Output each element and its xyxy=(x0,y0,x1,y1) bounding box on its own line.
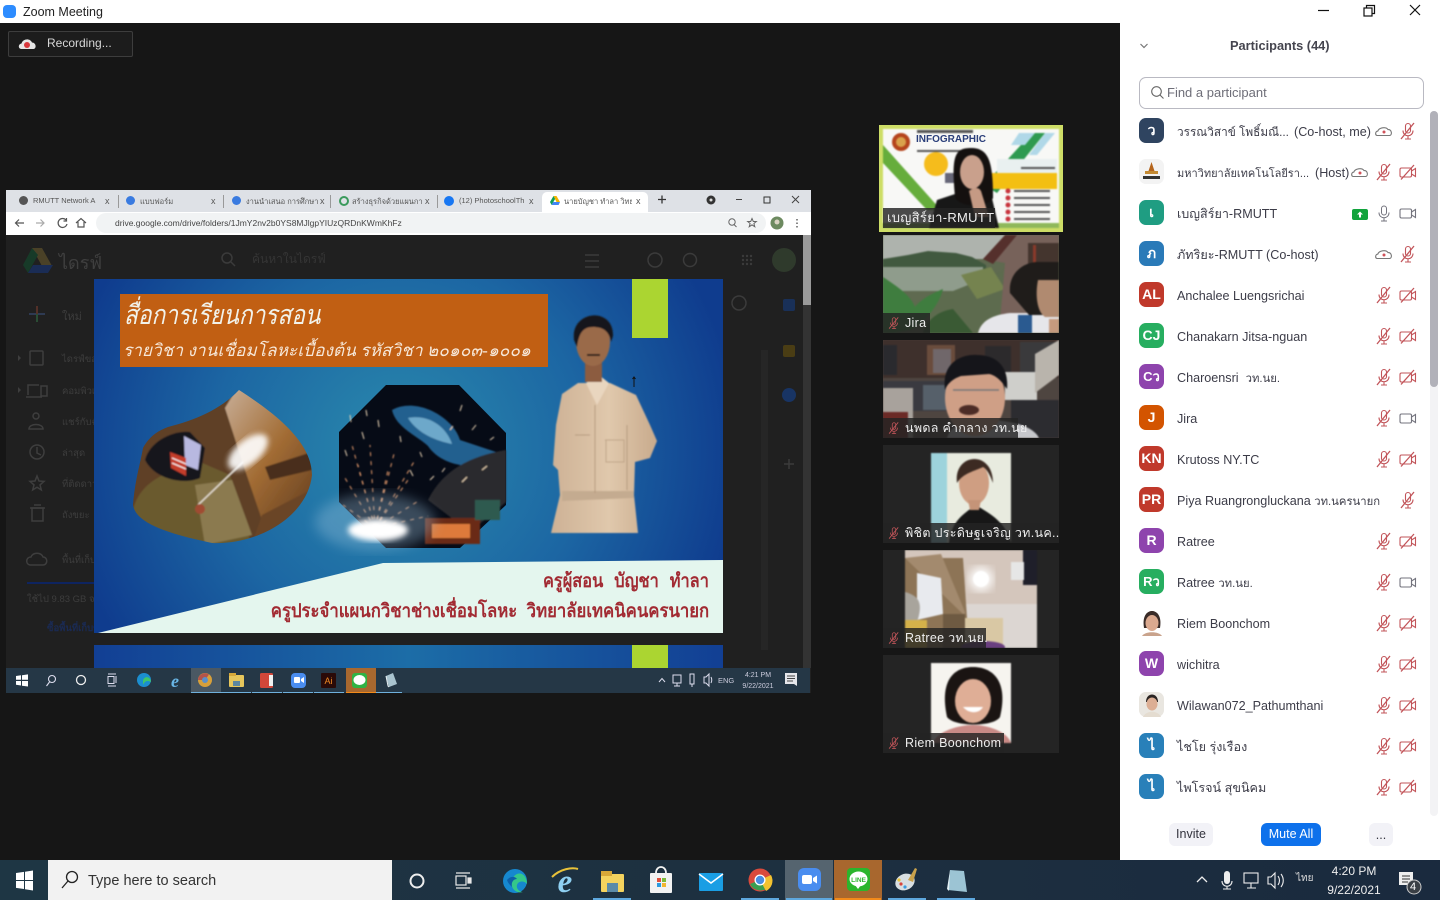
bottom banner shape xyxy=(98,560,723,633)
tab labels: x xyxy=(105,196,110,206)
participant row: Ratree: Ratree xyxy=(1177,535,1215,549)
participant row: Ratree xyxy=(1139,528,1416,553)
video tile: Pichit xyxy=(883,445,1059,543)
participant row: ไพโรจน์: ไพโรจน์ สุขนิคม xyxy=(1177,781,1266,795)
welder picture xyxy=(133,390,312,544)
Jira label xyxy=(883,313,930,333)
participant row: wichitra: wichitra xyxy=(1177,658,1220,672)
room video xyxy=(904,550,1038,648)
system clock: 4:20 PM xyxy=(1332,864,1376,878)
browser window buttons xyxy=(658,196,800,204)
taskbar icons xyxy=(16,860,1422,900)
participant row: ไพโรจน์: ไ xyxy=(1148,778,1155,794)
speaker label: นพดล คำกลาง วท.นย xyxy=(905,421,1028,435)
name label xyxy=(883,628,986,648)
participant row: มหาวิทยาลัย host: มหาวิทยาลัยเทคโนโลยีรา... xyxy=(1177,168,1309,180)
video tile: Jira xyxy=(883,235,1059,333)
participant row: Chanakarn: Chanakarn Jitsa-nguan xyxy=(1177,330,1307,344)
participant row: วรรณวิสาข์: วรรณวิสาข์ โพธิ์มณี... xyxy=(1177,125,1289,139)
participant row: Riem Boonchom: Riem Boonchom xyxy=(1177,617,1270,631)
more button xyxy=(1369,823,1393,846)
slide background and pictures xyxy=(94,279,723,633)
slide subheading: รายวิชา งานเชื่อมโลหะเบื้องต้น รหัสวิชา ๒๐๑๐๓-๑๐๐๑ xyxy=(123,341,531,360)
inner windows taskbar xyxy=(6,668,810,693)
recording indicator xyxy=(8,31,133,57)
shared screen: browser window xyxy=(6,190,811,693)
participant row: Piya xyxy=(1139,487,1414,512)
participant scrollbar xyxy=(1430,111,1438,816)
drive sidebar labels: ถังขยะ xyxy=(62,510,90,521)
participant row: มหาวิทยาลัย host xyxy=(1139,159,1416,184)
tab labels: งานนำเสนอ การศึกษา xyxy=(246,197,318,206)
participant row: Anchalee xyxy=(1139,282,1416,307)
next slide preview xyxy=(94,645,723,668)
icon: panel collapse chevron xyxy=(1140,44,1148,48)
participant row: wichitra: W xyxy=(1145,655,1158,671)
drive sidebar labels xyxy=(27,310,94,634)
sparks picture xyxy=(315,385,506,550)
inner taskbar highlights: e xyxy=(171,671,179,691)
participant row: ภัทริยะ xyxy=(1139,241,1414,266)
system clock: 9/22/2021 xyxy=(1327,883,1381,897)
participant row: ภัทริยะ: ภ xyxy=(1147,245,1156,261)
app title: Zoom Meeting xyxy=(23,5,103,19)
participant row: ไพโรจน์ xyxy=(1139,774,1416,799)
video tile: Riem Boonchom xyxy=(883,655,1059,753)
browser address bar xyxy=(6,212,811,235)
invite button: Invite xyxy=(1176,827,1206,841)
speaker label xyxy=(883,418,1018,438)
url text: drive.google.com/drive/folders/1JmY2nv2b0YS8MJlgpYIUzQRDnKWmKhFz xyxy=(115,218,402,228)
drive heading: ไดรฟ์ xyxy=(59,253,102,273)
participant row: Chanakarn: CJ xyxy=(1143,327,1160,343)
slide heading: สื่อการเรียนการสอน xyxy=(124,300,320,330)
participant row: Charoensri xyxy=(1139,364,1416,389)
name label xyxy=(883,523,1059,543)
participant row: Ratree: R xyxy=(1146,532,1157,548)
more button: ... xyxy=(1376,828,1386,842)
recording label: Recording... xyxy=(47,36,112,50)
participant row: วรรณวิสาข์: (Co-host, me) xyxy=(1294,125,1371,139)
drive sidebar labels: ล่าสุด xyxy=(62,448,85,459)
participant row: Anchalee: Anchalee Luengsrichai xyxy=(1177,289,1304,303)
drive logo and sidebar icons xyxy=(18,235,811,668)
icon: zoom logo xyxy=(3,5,16,18)
Jira video xyxy=(883,235,1059,333)
profile photo xyxy=(930,452,1012,543)
search prompt: Type here to search xyxy=(88,873,216,889)
icon: magnifier xyxy=(1151,86,1164,99)
participant row: Piya: Piya Ruangrongluckana วท.นครนายก xyxy=(1177,494,1380,508)
icon: search magnifier xyxy=(62,870,78,888)
video tile: Ratree xyxy=(883,550,1059,648)
presenter logo text: INFOGRAPHIC xyxy=(916,134,986,145)
language indicator: ไทย xyxy=(1296,873,1313,884)
teacher name: ครูผู้สอน บัญชา ทำลา xyxy=(543,571,709,592)
mute all button: Mute All xyxy=(1269,827,1313,841)
participant row: ภัทริยะ: ภัทริยะ-RMUTT (Co-host) xyxy=(1177,248,1319,262)
navigation icons xyxy=(14,218,86,228)
windows taskbar xyxy=(0,860,1440,900)
name label xyxy=(883,733,1004,753)
icon: recording cloud xyxy=(18,39,36,49)
name label: พิชิต ประดิษฐเจริญ วท.นค... xyxy=(905,526,1059,540)
participant row: วรรณวิสาข์ xyxy=(1139,118,1414,143)
meeting video area xyxy=(0,23,1120,860)
green accent block xyxy=(632,645,668,668)
participant row: มหาวิทยาลัย host: (Host) xyxy=(1315,166,1349,180)
inner taskbar highlights: Ai xyxy=(324,676,333,686)
participant row: Krutoss: Krutoss NY.TC xyxy=(1177,453,1259,467)
participant row: Wilawan xyxy=(1139,692,1416,717)
participant row: Riem Boonchom xyxy=(1142,611,1416,636)
tab labels: แบบฟอร์ม xyxy=(140,197,173,206)
mute all button xyxy=(1261,823,1321,846)
participant row: Jira: J xyxy=(1148,409,1155,425)
participant row: วรรณวิสาข์: ว xyxy=(1148,122,1155,138)
participant row: Ratree วท.นย.: Rว xyxy=(1143,574,1160,589)
participant row: เบญสิร์ยา: เ xyxy=(1149,204,1154,220)
presenter name label: เบญสิร์ยา-RMUTT xyxy=(887,210,994,225)
inner taskbar clock: 9/22/2021 xyxy=(742,683,774,690)
participant search box xyxy=(1139,77,1424,109)
participant row: Ratree วท.นย.: Ratree วท.นย. xyxy=(1177,576,1253,590)
invite button xyxy=(1169,823,1213,846)
inner taskbar language: ENG xyxy=(718,676,734,685)
tab labels: x xyxy=(529,196,534,206)
participant row: ไชโย: ไ xyxy=(1148,737,1155,753)
name label: Riem Boonchom xyxy=(905,736,1001,750)
panel: participants xyxy=(1120,23,1440,860)
participant row: Jira: Jira xyxy=(1177,412,1197,426)
tab labels: x xyxy=(636,196,640,206)
name label: Ratree วท.นย. xyxy=(905,631,988,645)
taskbar icons: e xyxy=(558,864,572,900)
scrollbar thumb xyxy=(1430,111,1438,387)
url pill xyxy=(96,213,766,233)
dimmed google drive page xyxy=(6,235,811,668)
participant row: Charoensri: Charoensri วท.นย. xyxy=(1177,371,1280,385)
slide: title slide xyxy=(94,279,723,633)
system clock xyxy=(1327,864,1381,897)
drive sidebar labels: ใหม่ xyxy=(62,311,82,323)
participant row: เบญสิร์ยา: เบญสิร์ยา-RMUTT xyxy=(1177,207,1277,221)
orange title box xyxy=(120,294,548,367)
participant row: Chanakarn xyxy=(1139,323,1416,348)
participants heading: Participants (44) xyxy=(1230,38,1330,53)
speaker video xyxy=(883,340,1059,438)
video tile: presenter with yellow active border xyxy=(879,125,1063,232)
title bar xyxy=(0,0,1440,23)
inner taskbar highlights xyxy=(16,668,797,693)
participant row: Piya: PR xyxy=(1142,491,1161,507)
participant row: Charoensri: Cว xyxy=(1143,369,1160,384)
participant row: Krutoss: KN xyxy=(1141,450,1162,466)
participant row: wichitra xyxy=(1139,651,1416,676)
participant row: Krutoss xyxy=(1139,446,1416,471)
inner taskbar clock: 4:21 PM xyxy=(745,672,771,679)
notification count: 4 xyxy=(1410,881,1416,893)
tab labels xyxy=(19,195,640,208)
participant row: ไชโย: ไชโย รุ่งเรือง xyxy=(1177,740,1247,754)
participant row: เบญสิร์ยา xyxy=(1139,200,1416,225)
tab labels: x xyxy=(425,196,430,206)
participant row: Anchalee: AL xyxy=(1142,286,1161,302)
search placeholder: Find a participant xyxy=(1167,85,1267,100)
green accent block xyxy=(632,279,668,338)
teacher department: ครูประจำแผนกวิชาช่างเชื่อมโลหะ วิทยาลัยเทคนิคนครนายก xyxy=(271,601,709,622)
active tab xyxy=(542,192,648,212)
presenter video xyxy=(882,128,1060,229)
participant row: ไชโย xyxy=(1139,733,1416,758)
Jira label: Jira xyxy=(905,316,926,330)
toolbar icons xyxy=(728,216,798,230)
participant row: Ratree วท.นย. xyxy=(1139,569,1416,594)
search box xyxy=(48,860,392,900)
icon: mouse cursor xyxy=(632,376,636,387)
window controls xyxy=(1318,4,1420,17)
drive search placeholder: ค้นหาในไดรฟ์ xyxy=(252,252,326,266)
teacher portrait xyxy=(551,315,657,533)
tab labels: x xyxy=(211,196,216,206)
browser tab strip xyxy=(6,190,811,212)
profile photo xyxy=(930,662,1012,744)
tab labels: x xyxy=(320,196,324,206)
taskbar icons: LINE xyxy=(851,877,867,884)
tab labels: (12) PhotoschoolTh xyxy=(459,196,524,205)
inner taskbar clock xyxy=(742,672,774,690)
participant row: Jira xyxy=(1139,405,1416,430)
participant row: Wilawan: Wilawan072_Pathumthani xyxy=(1177,699,1323,713)
video tile: speaker xyxy=(883,340,1059,438)
tab labels: RMUTT Network A xyxy=(33,196,95,205)
